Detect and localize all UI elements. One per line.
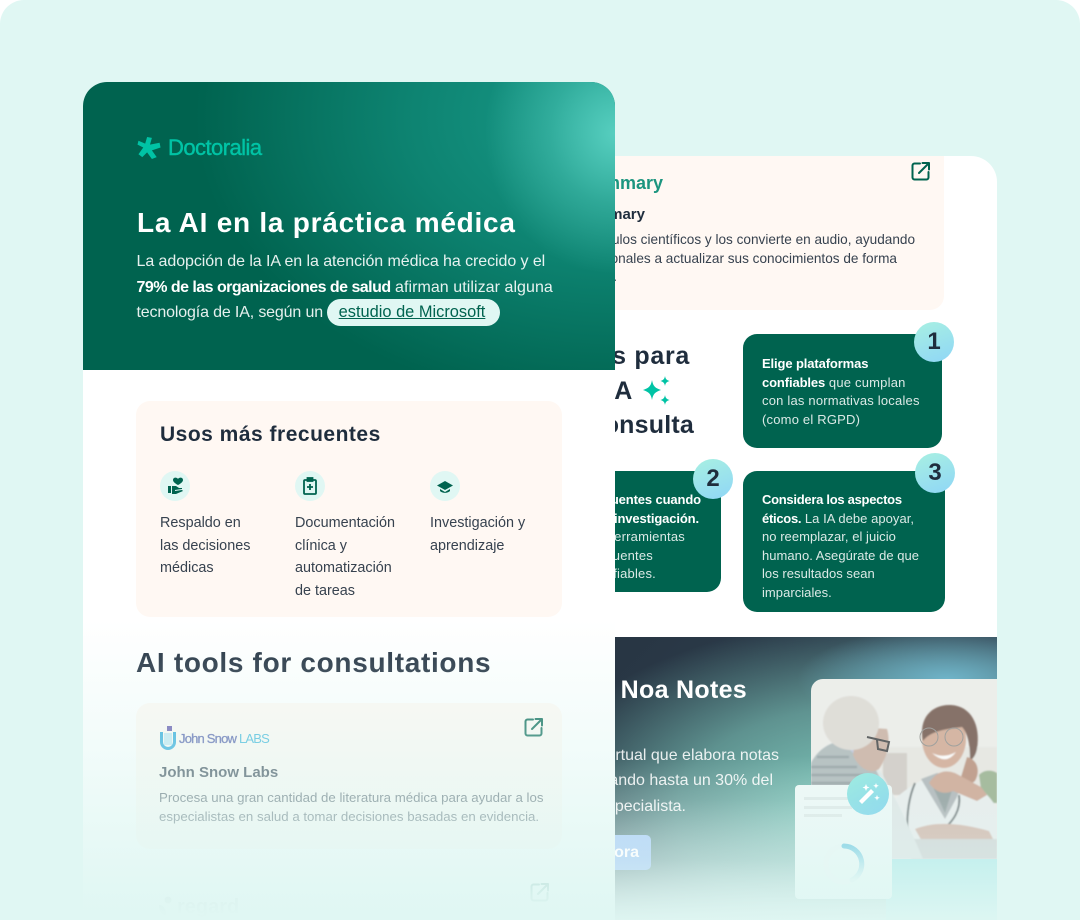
text: summary description: a los profesionales a actualizar sus conocimientos de forma: [537, 251, 897, 266]
text: Noa Notes description: Un asistente virtual que elabora notas: [510, 747, 779, 764]
text: summary description: rápida.: [575, 269, 617, 284]
card: tip 3: imparciales.: [762, 585, 832, 600]
link: Microsoft study: [327, 299, 500, 326]
text: research: [430, 515, 526, 554]
icon: hand with heart: [160, 471, 190, 501]
text: John Snow Labs description: especialistas en salud a tomar decisiones basadas en evidencia.: [159, 808, 539, 824]
button: try now: [500, 835, 651, 870]
patient: [811, 696, 923, 859]
card: tip 2: Usa herramientas: [579, 529, 685, 544]
text: John Snow Labs description: Procesa una gran cantidad de literatura médica para ayudar a los: [159, 790, 543, 805]
title: La AI en la práctica médica: [137, 206, 516, 238]
heading: tips: en la consulta: [524, 411, 694, 439]
text: Noa Notes description: [510, 747, 779, 815]
logo: regard: [158, 894, 248, 920]
badge: 1: 1: [927, 328, 941, 355]
text: hero intro: [136, 253, 553, 321]
icon: sparkles: [643, 376, 670, 405]
shape: pale panel under image: [886, 859, 997, 920]
text: Noa Notes description: tiempo del especialista.: [520, 798, 686, 815]
text: summary description: [531, 232, 915, 284]
badge: 3: 3: [928, 459, 942, 486]
icon: magic wand: [847, 773, 889, 815]
heading: tips: usar IA: [543, 376, 633, 404]
logo: John Snow Labs: [160, 726, 270, 750]
card: tip 3: los resultados sean: [762, 566, 875, 581]
card: tip 2: [500, 471, 721, 592]
badge: 2: 2: [706, 465, 720, 492]
heading: John Snow Labs: John Snow Labs: [159, 764, 278, 781]
icon: clipboard: [295, 471, 325, 501]
heading: summary tool: Summary: [577, 206, 645, 223]
panel: back page: [615, 156, 997, 908]
logo: regard: regard: [177, 896, 239, 918]
text: decision support: Respaldo en: [160, 515, 241, 531]
panel: frequent uses: [136, 401, 562, 617]
badge: 3: [915, 453, 955, 493]
badge: 1: [914, 322, 954, 362]
card: tip 1: confiables que cumplan: [762, 375, 906, 390]
item: documentation: [295, 471, 395, 599]
heading: tips: Consejos para: [509, 342, 690, 370]
text: hero intro: 79% de las organizaciones de salud afirman utilizar alguna: [136, 278, 553, 296]
card: generated document: [795, 785, 892, 899]
card: tip 1: Elige plataformas: [762, 356, 868, 371]
text: documentation: automatización: [295, 560, 392, 576]
card: tip 1: (como el RGPD): [762, 412, 860, 427]
text: hero intro: La adopción de la IA en la atención médica ha crecido y el: [136, 253, 545, 270]
text: research: Investigación y: [430, 515, 525, 531]
card: John Snow Labs: [136, 703, 562, 849]
card: tip 1: [743, 334, 942, 448]
panel: front page: [83, 82, 615, 920]
text: summary description: Resume artículos científicos y los convierte en audio, ayudando: [531, 232, 915, 247]
doctor: [900, 782, 994, 824]
heading: frequent uses: Usos más frecuentes: [160, 423, 381, 446]
text: documentation: clínica y: [295, 538, 347, 554]
logo: Doctoralia: Doctoralia: [168, 135, 262, 160]
card: tip 2: Consulta fuentes cuando: [548, 492, 701, 507]
item: research: [430, 471, 526, 554]
panel: hero: [83, 82, 615, 370]
text: documentation: Documentación: [295, 515, 395, 531]
text: documentation: [295, 515, 395, 599]
link: Microsoft study: estudio de Microsoft: [339, 303, 485, 321]
image: doctor with patient: [811, 679, 997, 859]
card: tip 1: con las normativas locales: [762, 393, 920, 408]
text: documentation: de tareas: [295, 583, 355, 599]
card: tip 3: [743, 471, 945, 612]
text: Noa Notes description: clínicas, ahorrando hasta un 30% del: [510, 772, 773, 789]
card: tip 2: con fuentes: [584, 548, 653, 563]
text: decision support: las decisiones: [160, 538, 250, 554]
card: tip 3: Considera los aspectos: [762, 492, 902, 507]
text: decision support: [160, 515, 250, 576]
button: try now: Probar ahora: [539, 844, 639, 861]
text: John Snow Labs description: [159, 790, 543, 824]
card: tip 3: humano. Asegúrate de que: [762, 548, 919, 563]
badge: 2: [693, 459, 733, 499]
heading: AI tools: AI tools for consultations: [136, 646, 491, 678]
chart: progress ring: [842, 844, 864, 876]
card: tip 2: confiables.: [592, 566, 656, 581]
logo: John Snow Labs: John Snow LABS: [179, 731, 269, 746]
panel: summary tool card: [500, 156, 944, 310]
item: decision support: [160, 471, 250, 576]
icon: Doctoralia star: [138, 137, 160, 159]
heading: tips: [509, 342, 694, 439]
text: decision support: médicas: [160, 560, 214, 576]
icon: external link: [530, 883, 549, 900]
card: tip 3: éticos. La IA debe apoyar,: [762, 511, 914, 526]
icon: external link: [912, 162, 930, 180]
logo: summary: Summary: [581, 173, 663, 193]
text: hero intro: tecnología de IA, según un: [136, 304, 323, 321]
panel: Noa Notes: [615, 637, 997, 918]
card: tip 3: no reemplazar, el juicio: [762, 529, 896, 544]
text: research: aprendizaje: [430, 538, 504, 554]
heading: Noa Notes: Noa Notes: [621, 676, 747, 704]
icon: graduation cap: [430, 471, 460, 501]
icon: external link: [524, 718, 543, 736]
card: tip 2: hagas una investigación.: [547, 511, 699, 526]
